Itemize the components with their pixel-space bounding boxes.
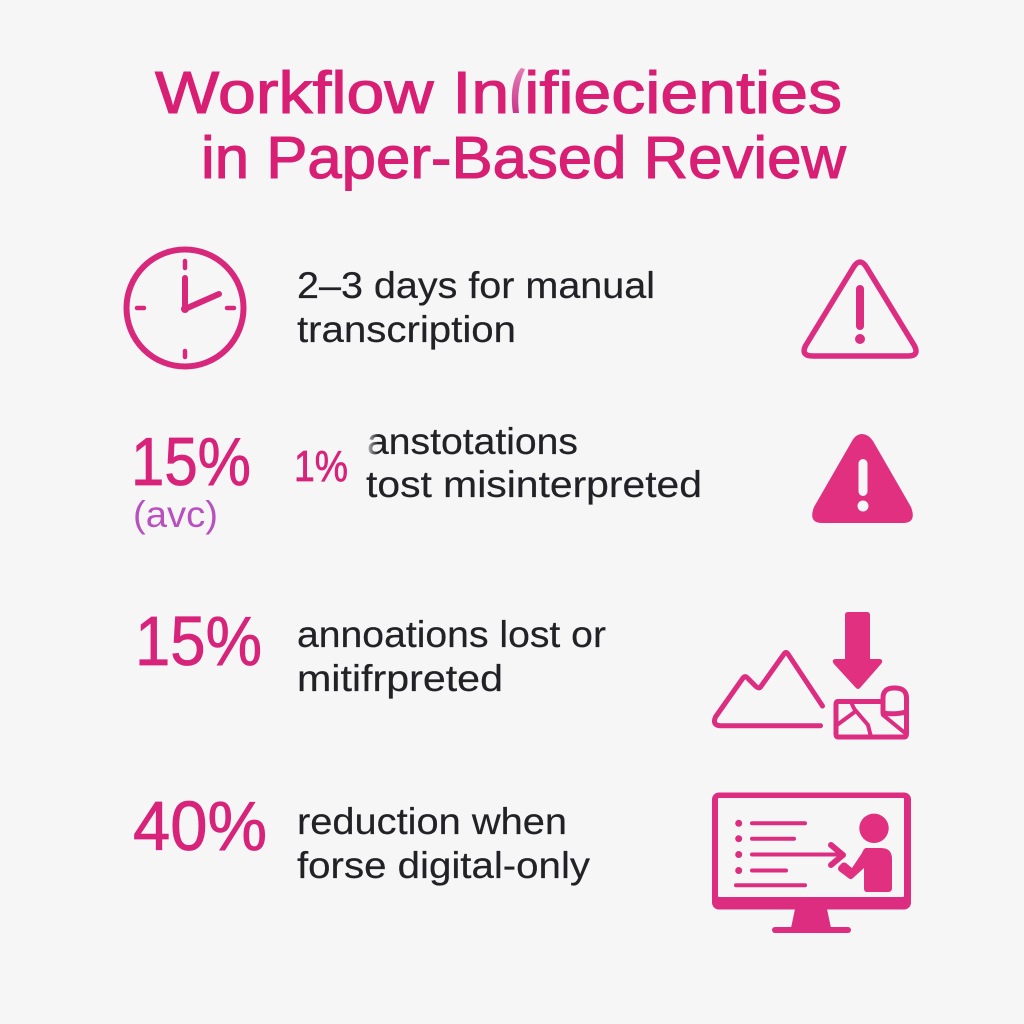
icon: clock (126, 250, 244, 366)
text: annotations lost (297, 614, 606, 699)
icon: monitor frame (712, 792, 911, 933)
stat: 15%: 15% (135, 602, 262, 680)
icon: presenter (838, 814, 892, 892)
text: digital-only reduction: reduction when (297, 801, 567, 842)
text: annotations misinterpreted: anstotations (367, 421, 578, 462)
stat: 40%: 40% (133, 787, 267, 865)
text: annotations lost: annoations lost or (297, 614, 606, 655)
stat: 15% avc (131, 424, 251, 535)
text: transcription (297, 265, 655, 350)
icon: mountain and map download (714, 612, 906, 737)
text: annotations lost: mitifrpreted (297, 658, 503, 699)
icon: monitor presentation (712, 792, 911, 933)
text: transcription: 2–3 days for manual (297, 265, 655, 306)
text: annotations misinterpreted (364, 421, 702, 505)
stat: 15% avc: 15% (131, 424, 251, 500)
list lines (735, 820, 843, 885)
icon: filled warning triangle (812, 434, 913, 523)
title: in Paper-Based Review (201, 125, 846, 191)
text: digital-only reduction: forse digital-only (297, 845, 591, 886)
stat: 1%: 1% (294, 442, 348, 491)
icon: down arrow (833, 612, 882, 689)
icon: mountain (714, 652, 822, 726)
text: transcription: transcription (297, 309, 516, 350)
icon: outlined warning triangle (804, 262, 916, 356)
title: Workflow Inlifiecienties (155, 60, 842, 126)
text: annotations misinterpreted: tost misinterpreted (366, 464, 702, 505)
icon: map (836, 688, 906, 737)
stat: 15% avc: (avc) (133, 494, 218, 535)
title (155, 60, 846, 191)
text: digital-only reduction (297, 801, 591, 886)
